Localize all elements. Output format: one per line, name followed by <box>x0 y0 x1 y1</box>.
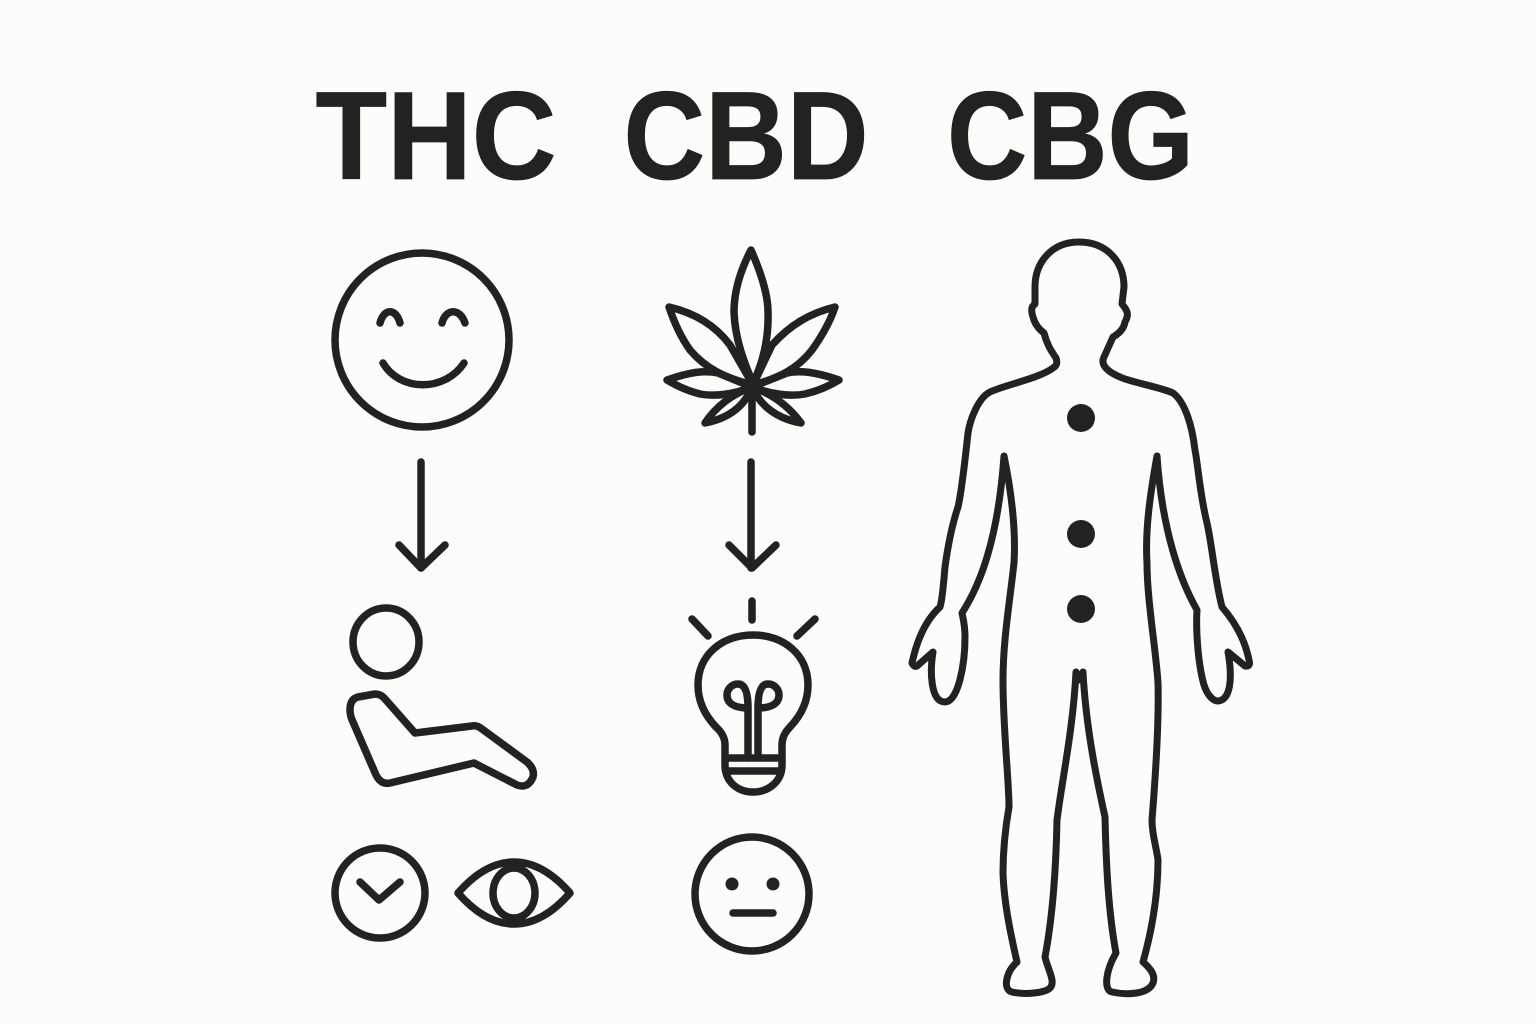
icon: cannabis leaf <box>667 250 839 432</box>
icon: clock <box>335 848 425 938</box>
body point: upper <box>1067 404 1095 432</box>
body point: lower <box>1067 595 1095 623</box>
title: CBD: CBD <box>624 67 868 206</box>
title: CBG: CBG <box>947 67 1194 206</box>
icon: human body outline <box>912 242 1250 994</box>
icon: light bulb <box>692 601 815 792</box>
icon: eye <box>458 862 570 924</box>
icon: smiling face <box>335 253 509 427</box>
icon: relaxed reclining person <box>350 608 533 786</box>
title: THC: THC <box>316 67 556 206</box>
arrow: CBD down <box>729 462 776 568</box>
icon: neutral face <box>695 837 809 951</box>
body point: middle <box>1067 520 1095 548</box>
arrow: THC down <box>399 462 445 568</box>
